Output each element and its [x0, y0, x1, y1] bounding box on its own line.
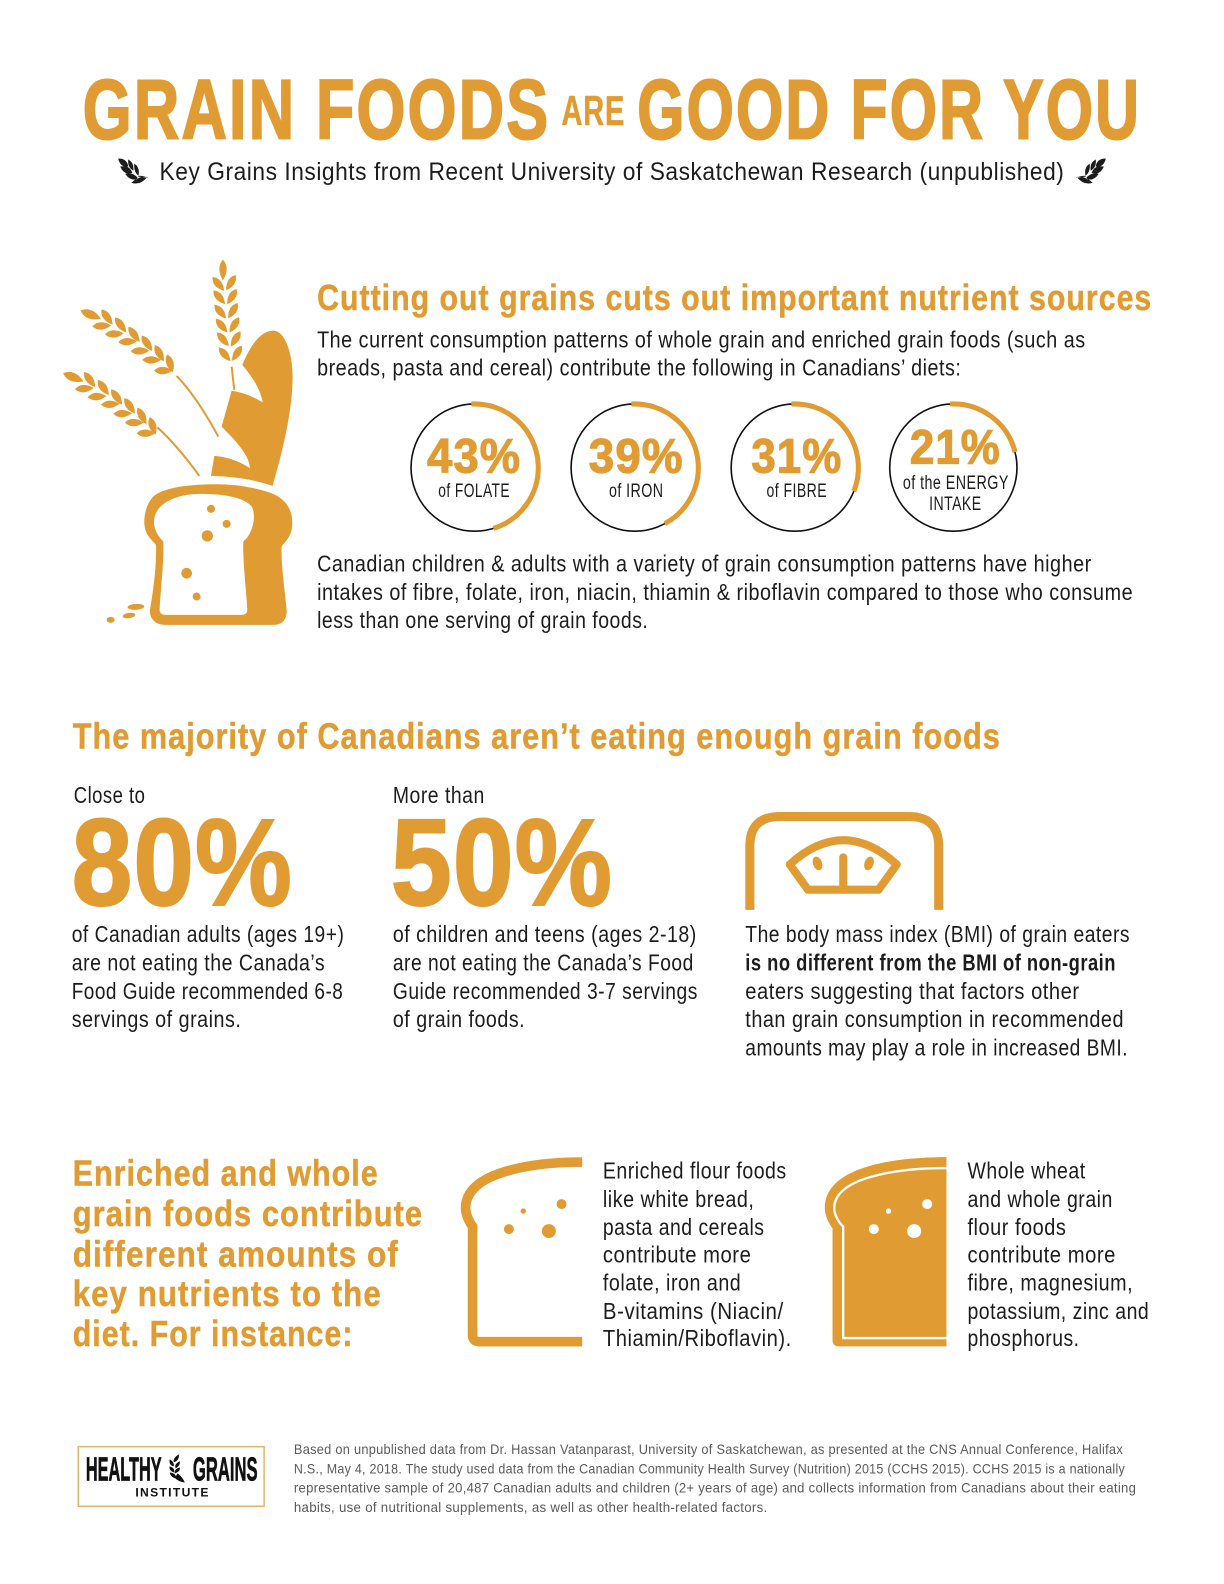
- heading: enriched and whole grain: key nutrients to the: [73, 1273, 382, 1314]
- icon: logo wheat: [170, 1454, 185, 1483]
- text: consumption intro: breads, pasta and cereal) contribute the following in Canadians’ diets:: [317, 355, 961, 381]
- wheat upright: [210, 259, 245, 390]
- text: enriched flour foods: contribute more: [603, 1241, 751, 1267]
- text: enriched flour foods: Thiamin/Riboflavin).: [603, 1325, 792, 1351]
- heading: enriched and whole grain: grain foods contribute: [73, 1193, 423, 1234]
- text: whole wheat foods: flour foods: [967, 1214, 1066, 1240]
- stat: 43% folate: 43%: [427, 430, 521, 484]
- stat: 50% children: are not eating the Canada’s Food: [393, 949, 694, 975]
- stat: 80% adults: servings of grains.: [72, 1006, 241, 1032]
- stat: 39% iron: 39%: [589, 430, 684, 484]
- logo: Healthy Grains Institute: GRAINS: [193, 1451, 258, 1488]
- stat: 21% energy: of the ENERGY: [903, 473, 1009, 494]
- stat: 80% adults: are not eating the Canada’s: [72, 949, 325, 975]
- stat: 80% adults: of Canadian adults (ages 19+): [72, 921, 344, 947]
- stat: 80% adults: 80%: [72, 794, 293, 932]
- text: whole wheat foods: phosphorus.: [967, 1325, 1080, 1351]
- icon: weighing scale: [750, 816, 939, 910]
- wheat lower: [62, 369, 199, 476]
- text: consumption intro: [317, 326, 1086, 381]
- text: higher intakes: Canadian children & adults with a variety of grain consumption patterns have higher: [317, 551, 1092, 577]
- logo: Healthy Grains Institute: INSTITUTE: [135, 1486, 209, 1500]
- stat: 50% children: of children and teens (ages 2-18): [393, 921, 697, 947]
- title: ARE: [562, 88, 625, 134]
- icon: right laurel: [1077, 159, 1106, 184]
- text: enriched flour foods: Enriched flour foods: [603, 1158, 787, 1184]
- stat: 50% children: More than: [393, 782, 485, 808]
- text: higher intakes: less than one serving of grain foods.: [317, 607, 648, 633]
- heading: enriched and whole grain: different amounts of: [73, 1233, 399, 1274]
- bread crumbs: [207, 505, 215, 513]
- text: enriched flour foods: like white bread,: [603, 1186, 754, 1212]
- stat: 80% adults: Close to: [74, 782, 145, 808]
- logo: Healthy Grains Institute: [78, 1447, 264, 1506]
- icon: left laurel: [118, 159, 147, 184]
- text: enriched flour foods: pasta and cereals: [603, 1214, 764, 1240]
- text: enriched flour foods: B-vitamins (Niacin/: [603, 1298, 784, 1324]
- stat: 21% energy: 21%: [910, 421, 1001, 475]
- text: whole wheat foods: contribute more: [967, 1241, 1116, 1267]
- text: whole wheat foods: potassium, zinc and: [967, 1298, 1149, 1324]
- stat: 80% adults: Food Guide recommended 6-8: [72, 978, 343, 1004]
- stat: 80% adults: [72, 782, 344, 1032]
- text: BMI: amounts may play a role in increased BMI.: [745, 1034, 1128, 1060]
- text: enriched flour foods: [603, 1158, 792, 1351]
- text: whole wheat foods: fibre, magnesium,: [967, 1270, 1133, 1296]
- text: higher intakes: [317, 551, 1133, 633]
- text: source note: habits, use of nutritional supplements, as well as other health-related factors.: [294, 1499, 768, 1515]
- bread slice: [144, 484, 292, 625]
- text: BMI: [745, 921, 1130, 1060]
- stat: 50% children: Guide recommended 3-7 servings: [393, 978, 698, 1004]
- heading: enriched and whole grain: Enriched and whole: [73, 1153, 379, 1194]
- wheat upper: [79, 306, 218, 437]
- text: whole wheat foods: Whole wheat: [967, 1158, 1086, 1184]
- stat: 43% folate: [408, 401, 542, 534]
- title: GRAIN FOODS: [83, 61, 550, 156]
- text: BMI: The body mass index (BMI) of grain eaters: [745, 921, 1130, 947]
- text: BMI: eaters suggesting that factors other: [745, 978, 1080, 1004]
- text: source note: representative sample of 20,487 Canadian adults and children (2+ years of age) and collects information from Canadians about their eating: [294, 1480, 1136, 1496]
- text: BMI: is no different from the BMI of non-grain: [745, 949, 1116, 975]
- stat: 39% iron: of IRON: [609, 481, 664, 502]
- stat: 31% fibre: of FIBRE: [767, 481, 827, 502]
- stat: 21% energy: [886, 401, 1020, 534]
- icon: white bread slice outline: [466, 1162, 582, 1342]
- text: source note: N.S., May 4, 2018. The study used data from the Canadian Community Health Survey (Nutrition) 2015 (CCHS 2015). CCHS 2015 is a nationally: [294, 1460, 1126, 1476]
- text: enriched flour foods: folate, iron and: [603, 1270, 741, 1296]
- heading: majority of Canadians: The majority of Canadians aren’t eating enough grain foods: [73, 715, 1001, 756]
- heading: enriched and whole grain: [73, 1153, 423, 1354]
- stat: 50% children: [391, 782, 698, 1032]
- subtitle: Key Grains Insights from Recent University of Saskatchewan Research (unpublished): [160, 158, 1064, 186]
- stat: 31% fibre: 31%: [751, 430, 842, 484]
- text: BMI: than grain consumption in recommended: [745, 1006, 1124, 1032]
- stat: 39% iron: [568, 401, 702, 534]
- stat: 50% children: of grain foods.: [393, 1006, 525, 1032]
- text: whole wheat foods: [967, 1158, 1149, 1351]
- stat: 50% children: 50%: [391, 794, 613, 932]
- text: whole wheat foods: and whole grain: [967, 1186, 1113, 1212]
- stat: 43% folate: of FOLATE: [438, 481, 510, 502]
- stat: 21% energy: INTAKE: [929, 494, 982, 515]
- title: [83, 61, 1141, 156]
- icon: bread and wheat illustration: [62, 259, 293, 625]
- stat: 31% fibre: [728, 401, 862, 534]
- logo: Healthy Grains Institute: HEALTHY: [86, 1451, 162, 1488]
- icon: whole wheat bread slice filled: [825, 1157, 946, 1346]
- text: consumption intro: The current consumption patterns of whole grain and enriched grain foods (such as: [317, 326, 1086, 352]
- text: source note: [294, 1441, 1136, 1515]
- text: source note: Based on unpublished data from Dr. Hassan Vatanparast, University of Saskatchewan, as presented at the CNS Annual Conference, Halifax: [294, 1441, 1123, 1457]
- heading: enriched and whole grain: diet. For instance:: [73, 1313, 353, 1354]
- baguette: [211, 331, 293, 486]
